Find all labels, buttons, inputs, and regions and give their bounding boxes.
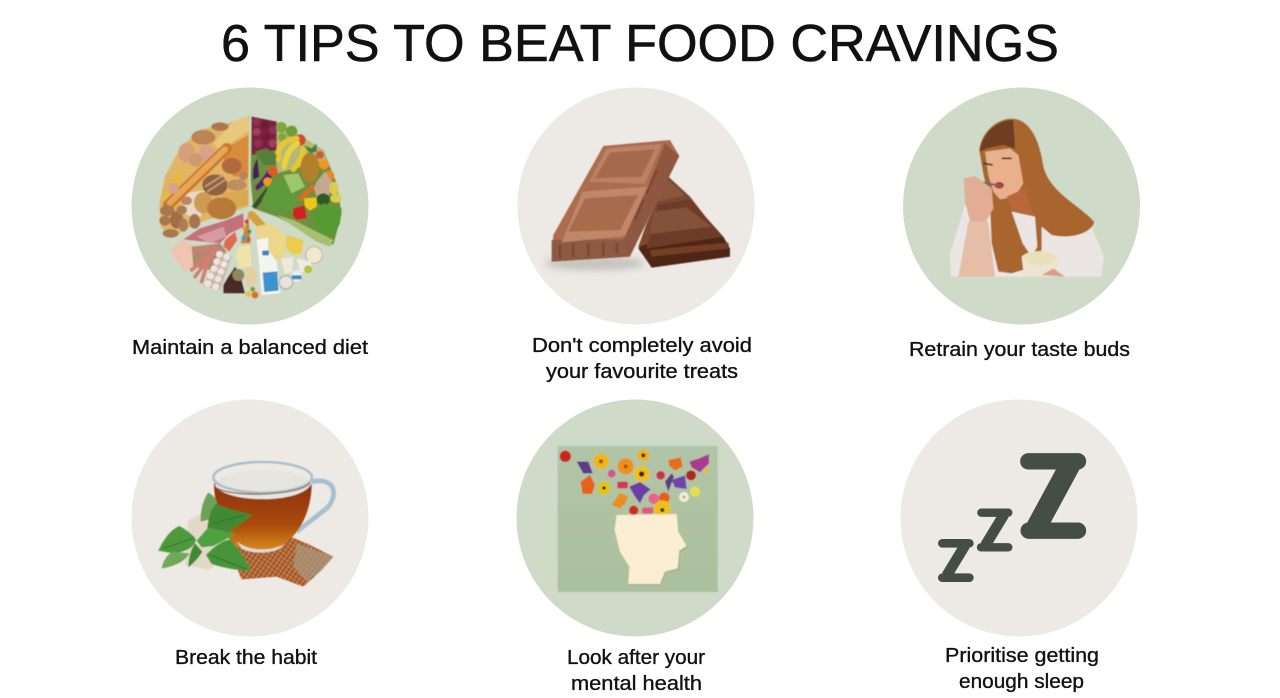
label xyxy=(532,335,752,383)
circle background: beige xyxy=(132,400,368,636)
icon: chocolate xyxy=(545,140,730,271)
circle background: green xyxy=(132,88,368,324)
circle background: green xyxy=(903,88,1140,324)
label xyxy=(945,645,1099,693)
bottom right dairy xyxy=(252,215,268,233)
icon: food plate xyxy=(159,116,342,298)
label xyxy=(567,647,705,695)
label: mental health xyxy=(571,673,702,695)
icon: woman eating ice cream xyxy=(950,119,1104,277)
top right vegetables xyxy=(251,117,342,245)
label: your favourite treats xyxy=(546,361,738,383)
label: Look after your xyxy=(567,647,705,669)
label: Maintain a balanced diet xyxy=(132,337,368,359)
panel: retrain taste buds xyxy=(903,88,1140,361)
bottom left proteins xyxy=(170,213,253,293)
title: 6 TIPS TO BEAT FOOD CRAVINGS xyxy=(221,15,1059,73)
circle background: beige xyxy=(900,400,1138,636)
panel: maintain a balanced diet xyxy=(132,88,368,359)
panel: look after mental health xyxy=(516,400,754,695)
icon: cup of tea xyxy=(158,462,334,587)
icon: head with flowers xyxy=(558,446,718,592)
label: Retrain your taste buds xyxy=(909,339,1130,361)
label: Prioritise getting xyxy=(945,645,1099,667)
label: Break the habit xyxy=(175,647,317,669)
panel: prioritise sleep xyxy=(900,400,1138,693)
label: enough sleep xyxy=(959,671,1084,693)
panel: don't avoid treats xyxy=(518,88,754,383)
icon: sleep z z z xyxy=(942,461,1078,578)
circle background: beige xyxy=(518,88,754,324)
circle background: green xyxy=(516,400,754,636)
label: Don't completely avoid xyxy=(532,335,752,357)
panel: break the habit xyxy=(132,400,368,669)
